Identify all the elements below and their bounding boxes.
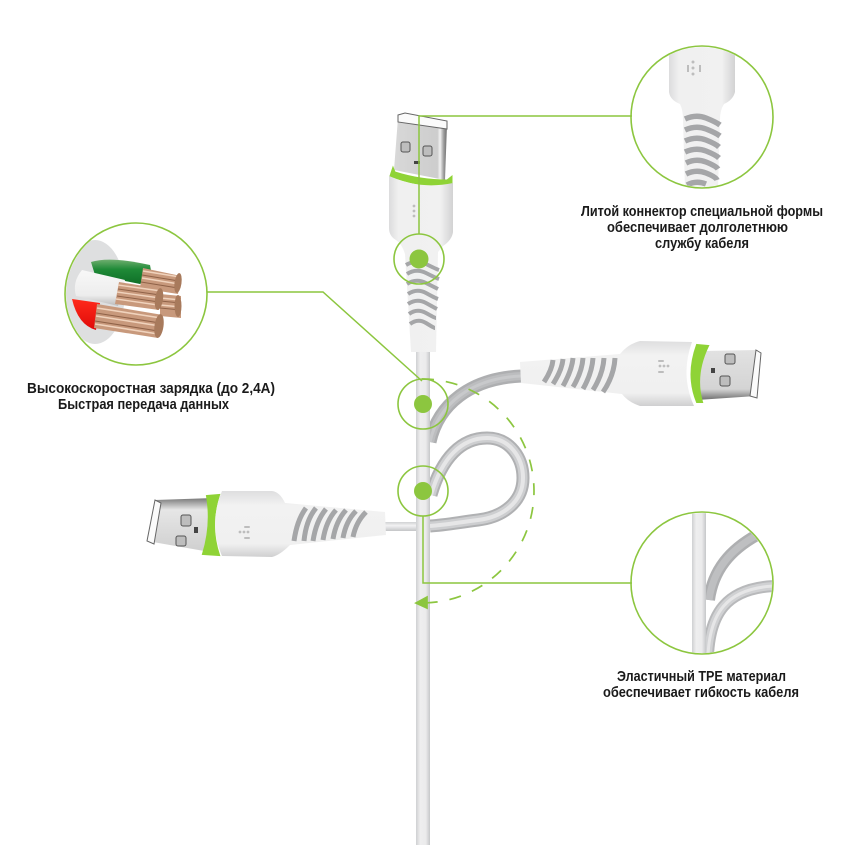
logo, right (658, 360, 669, 373)
text: connector caption: обеспечивает долголетнюю (607, 219, 788, 236)
moulded housing, top (389, 176, 453, 352)
strain relief stripes, left (294, 508, 366, 541)
marker: TPE (398, 466, 448, 516)
marker: wires (398, 379, 448, 429)
text: TPE caption (603, 668, 799, 701)
dashed rotation arc with arrow (416, 379, 534, 608)
left connector (147, 491, 386, 557)
text: charging caption (27, 380, 275, 413)
main vertical cable (416, 345, 430, 845)
marker: top connector (394, 234, 444, 284)
USB plug, left (147, 498, 214, 552)
green collar, left (203, 495, 219, 555)
callout line: TPE (423, 516, 632, 583)
short cable stub, left (385, 522, 416, 531)
grey sheath (65, 240, 125, 344)
moulded housing, left (215, 491, 386, 557)
right connector (520, 341, 761, 406)
callout line: wires (207, 292, 422, 381)
green collar, right (692, 345, 708, 402)
text: connector caption: службу кабеля (655, 235, 749, 252)
strain relief stripes, right (544, 358, 615, 392)
text: TPE caption: обеспечивает гибкость кабеля (603, 684, 799, 701)
inset: TPE cable (631, 505, 775, 665)
USB plug, top (394, 113, 447, 180)
logo, left (239, 526, 250, 539)
text: TPE caption: Эластичный TPE материал (617, 668, 786, 685)
text: connector caption (581, 203, 823, 252)
strain relief stripes, top (406, 262, 439, 328)
looped grey cable (430, 376, 523, 526)
top connector (389, 113, 453, 352)
text: charging caption: Быстрая передача данных (58, 396, 230, 413)
USB plug, right (697, 350, 761, 400)
text: charging caption: Высокоскоростная зарядка (до 2,4А) (27, 380, 275, 397)
callout line: top connector (419, 116, 632, 234)
logo, top (413, 205, 415, 217)
inset: connector detail (631, 40, 773, 190)
inset: wire bundle (65, 223, 207, 365)
green collar, top (390, 167, 452, 186)
moulded housing, right (520, 341, 694, 406)
